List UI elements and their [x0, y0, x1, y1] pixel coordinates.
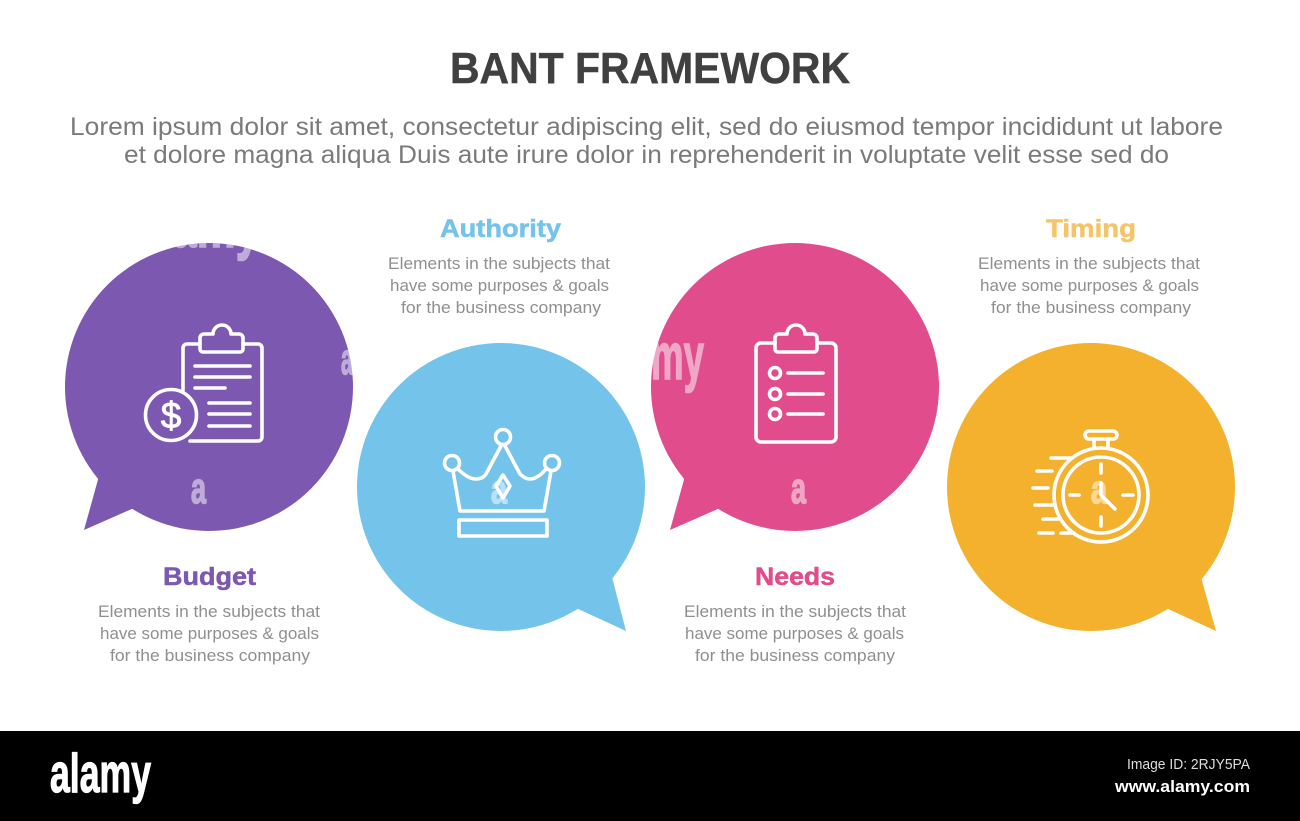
panel: needs bubble: my: [651, 319, 704, 393]
heading: timing: Timing: [1046, 215, 1136, 243]
panel: authority bubble: [357, 343, 645, 631]
text block: needs description: have some purposes & goals: [685, 624, 904, 643]
text block: budget description: Elements in the subjects that: [98, 602, 320, 621]
heading: budget: Budget: [163, 563, 257, 591]
text block: authority description: Elements in the subjects that: [388, 254, 610, 273]
text block: authority description: have some purposes & goals: [390, 276, 609, 295]
footer band: [0, 731, 1300, 821]
panel: budget bubble: a: [191, 464, 206, 513]
text block: needs description: [684, 602, 906, 665]
icon: clipboard with dollar coin: $: [161, 395, 181, 436]
text block: budget description: have some purposes & goals: [100, 624, 319, 643]
footer image id: Image ID: 2RJY5PA: [1127, 756, 1250, 773]
icon: clipboard checklist: [756, 325, 836, 442]
footer logo: alamy: [50, 742, 151, 804]
icon: crown: [444, 430, 560, 536]
panel: budget bubble: [65, 243, 353, 531]
panel: needs bubble: a: [791, 464, 806, 513]
subtitle text: et dolore magna aliqua Duis aute irure dolor in reprehenderit in voluptate velit esse sed do: [124, 141, 1169, 169]
subtitle text: Lorem ipsum dolor sit amet, consectetur adipiscing elit, sed do eiusmod tempor incididunt ut labore: [70, 113, 1223, 141]
text block: budget description: [98, 602, 320, 665]
panel: timing bubble: [947, 343, 1235, 631]
panel: budget bubble: a: [341, 335, 353, 384]
icon: stopwatch: [1033, 431, 1148, 542]
heading: authority: Authority: [440, 215, 561, 243]
text block: authority description: for the business company: [401, 298, 602, 317]
text block: timing description: for the business company: [991, 298, 1192, 317]
footer url: www.alamy.com: [1114, 777, 1250, 796]
panel: timing bubble: a: [1091, 468, 1108, 512]
text block: needs description: Elements in the subjects that: [684, 602, 906, 621]
text block: authority description: [388, 254, 610, 317]
title: BANT FRAMEWORK: [450, 44, 850, 93]
icon: clipboard with dollar coin: [146, 325, 262, 441]
watermark fragment: lamy: [160, 187, 260, 261]
text block: budget description: for the business company: [110, 646, 311, 665]
panel: needs bubble: [651, 243, 939, 531]
text block: timing description: [978, 254, 1200, 317]
text block: timing description: Elements in the subjects that: [978, 254, 1200, 273]
subtitle text: [70, 113, 1223, 169]
text block: timing description: have some purposes & goals: [980, 276, 1199, 295]
heading: needs: Needs: [755, 563, 835, 591]
text block: needs description: for the business company: [695, 646, 896, 665]
panel: authority bubble: a: [491, 468, 508, 512]
